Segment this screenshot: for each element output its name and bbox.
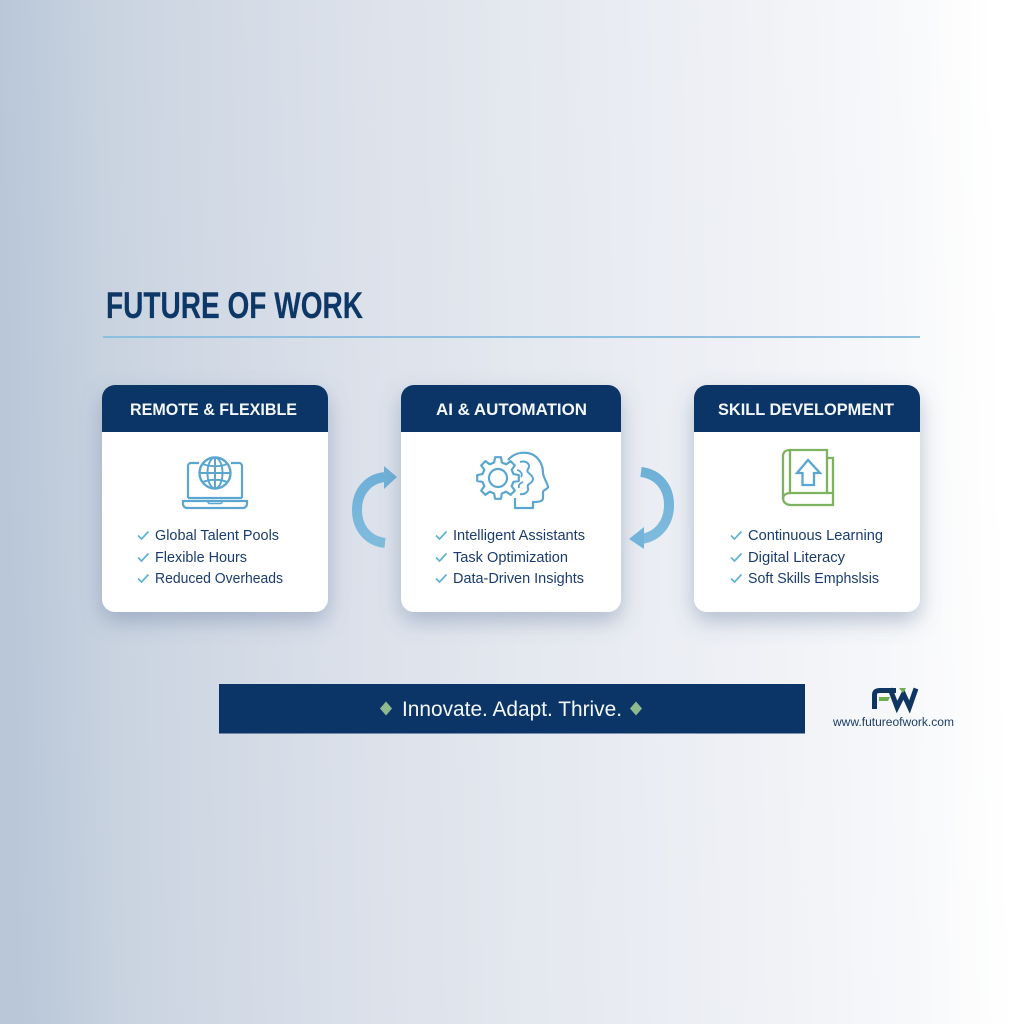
checklist: skill development [731,528,883,587]
panel header: remote and flexible [102,385,328,432]
checklist: remote and flexible: Reduced Overheads [155,571,283,587]
panel: remote and flexible [102,385,328,612]
checklist: skill development: Soft Skills Emphslsis [748,571,879,587]
logo: FW [874,688,916,709]
icon: right diamond [630,702,642,716]
website url: www.futureofwork.com [832,717,954,729]
panel header: remote and flexible: REMOTE & FLEXIBLE [130,401,297,419]
checklist: remote and flexible: Flexible Hours [155,550,247,566]
checklist: remote and flexible: Global Talent Pools [155,528,279,544]
panel header: AI and automation: AI & AUTOMATION [436,401,587,419]
panel: skill development [694,385,920,612]
panel header: AI and automation [401,385,621,432]
icon: gear and head [477,453,548,508]
banner: tagline [219,684,805,734]
icon: book with up arrow [783,450,833,505]
checklist: remote and flexible [138,528,283,587]
arrow: right curved [629,472,669,549]
arrow: left curved [357,466,397,543]
panel: AI and automation [401,385,621,612]
checklist: AI and automation: Data-Driven Insights [453,571,584,587]
checklist: skill development: Continuous Learning [748,528,883,544]
tagline text: Innovate. Adapt. Thrive. [402,698,622,721]
panel header: skill development [694,385,920,432]
title: FUTURE OF WORK [106,285,363,326]
checklist: AI and automation: Task Optimization [453,550,568,566]
panel header: skill development: SKILL DEVELOPMENT [718,401,894,419]
checklist: AI and automation [436,528,585,587]
icon: laptop with globe [183,457,247,508]
checklist: skill development: Digital Literacy [748,550,846,566]
checklist: AI and automation: Intelligent Assistants [453,528,585,544]
icon: left diamond [380,702,392,716]
